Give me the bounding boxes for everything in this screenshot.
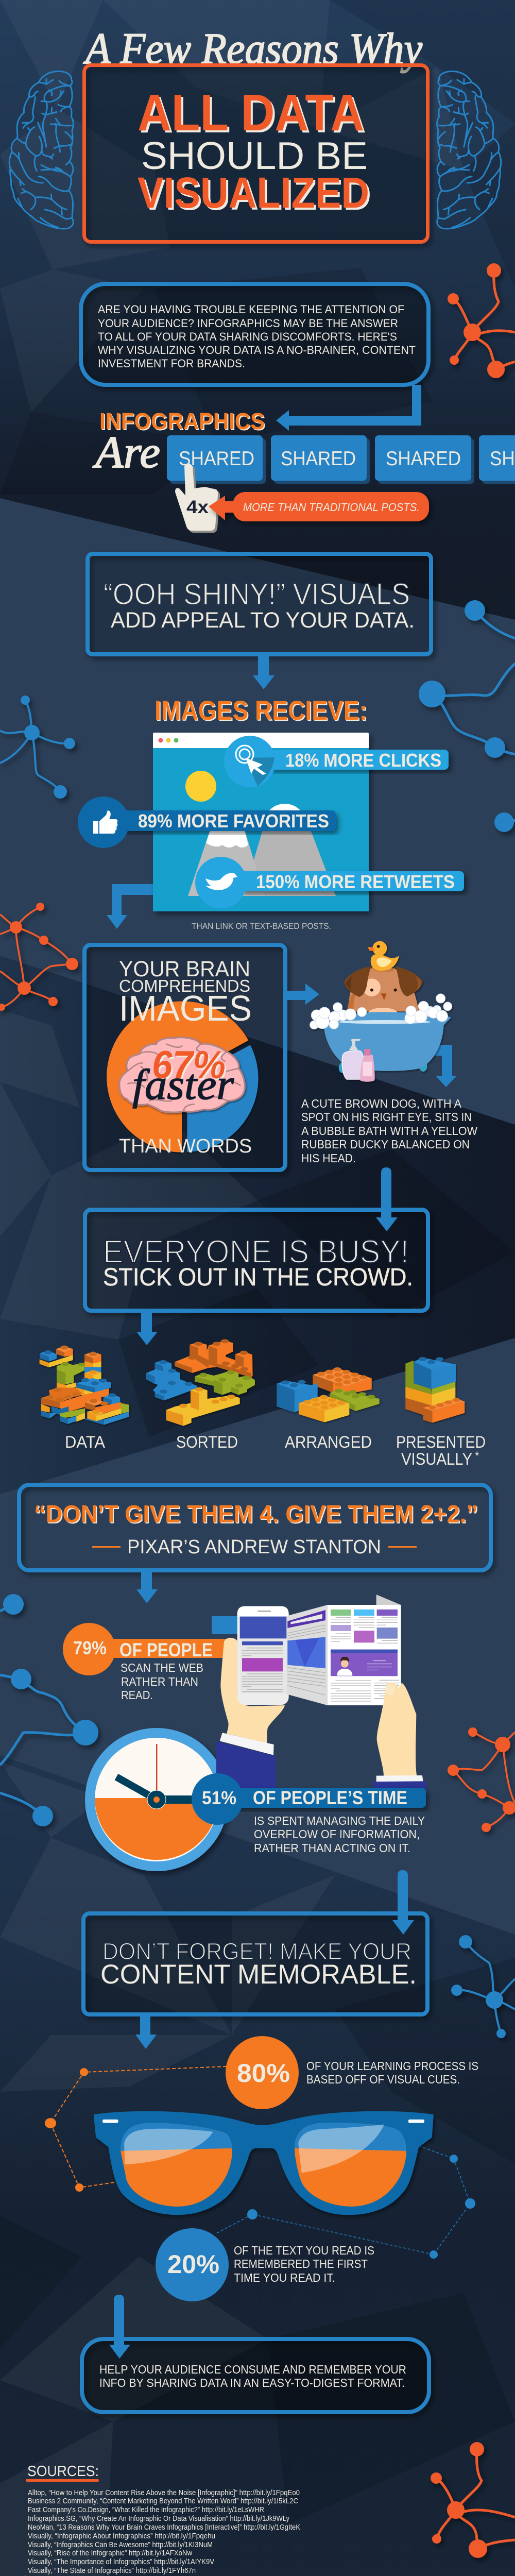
text block: closing copy: INFO BY SHARING DATA IN AN EASY-TO-DIGEST FORMAT. [99,2376,405,2389]
button: SHARED 1: SHARED [179,448,254,470]
text block: text remembered: TIME YOU READ IT. [234,2271,335,2284]
text block: source list: Alltop, “How to Help Your Content Rise Above the Noise [Infographic]” http://bit.ly/1FpqEo0 [28,2489,300,2497]
stat: 79% of people: OF PEOPLE [119,1639,213,1660]
heading: your brain: YOUR BRAIN [119,957,250,981]
text block: source list: Visually, “Rise of the Infographic” http://bit.ly/1AFXoNw [28,2549,192,2557]
label: data: DATA [65,1433,106,1451]
panel: pixar quote box [19,1485,491,1570]
arrow: quote to stats [136,1572,158,1603]
quote: don't give them 4: “DON’T GIVE THEM 4. GIVE THEM 2+2.” [35,1502,479,1529]
panel: intro text box [81,284,428,385]
heading: SHOULD BE: SHOULD BE [141,134,368,177]
text block: managing overflow: RATHER THAN ACTING ON IT. [254,1841,410,1855]
neuron: blue left [0,696,75,799]
stat: 18% more clicks [224,736,449,787]
heading: sources: SOURCES: [27,2463,99,2480]
callout: more than traditional posts [209,492,429,521]
heading: IMAGES RECIEVE: IMAGES RECIEVE: [156,697,368,727]
heading: ALL DATA: ALL DATA [140,86,366,144]
button: SHARED 4 cropped [479,435,515,484]
text block: scan the web: READ. [121,1688,153,1702]
panel: don't forget box [83,1913,427,2014]
heading: INFOGRAPHICS: INFOGRAPHICS [100,409,266,435]
text block: closing copy [99,2363,406,2389]
heading: VISUALIZED: VISUALIZED [140,171,371,219]
heading: content memorable: CONTENT MEMORABLE. [100,1959,417,1990]
button: SHARED 2 [271,435,370,484]
stat: 20% [156,2228,229,2301]
stat: 80% [226,2036,299,2109]
text block: dog description: HIS HEAD. [301,1151,356,1165]
stat: 20%: 20% [167,2250,219,2279]
heading: stick out in the crowd: STICK OUT IN THE CROWD. [103,1264,413,1291]
stat: 18% more clicks: 18% MORE CLICKS [285,750,441,771]
text block: source list: Visually, “Infographics Can Be Awesome” http://bit.ly/1KI3NuM [28,2541,213,2549]
text block: learning process: BASED OFF OF VISUAL CUES. [306,2073,460,2086]
label: presented visually: VISUALLY [401,1450,472,1468]
text block: scan the web [121,1661,203,1702]
label: presented visually [396,1433,486,1468]
illustration: dog in bubble bath with duck [310,941,452,1082]
heading: IMAGES RECIEVE: IMAGES RECIEVE: [154,696,367,726]
text block: dog description: SPOT ON HIS RIGHT EYE, SITS IN [301,1110,472,1124]
illustration: hands holding phone and brochure [216,1595,427,1789]
heading: ooh shiny visuals: “OOH SHINY!” VISUALS [104,578,410,611]
heading: INFOGRAPHICS: INFOGRAPHICS [99,408,265,434]
text block: dog description: A BUBBLE BATH WITH A YELLOW [301,1124,477,1138]
heading: everyone is busy: EVERYONE IS BUSY! [103,1234,409,1270]
text block: scan the web: SCAN THE WEB [121,1661,203,1674]
arrow: browser to brain box [107,884,153,929]
text block: source list: Infographics.SG, “Why Create An Infographic Or Data Visualisation” http://bit.ly/1Jk9WLy [28,2515,290,2523]
stat: 51% of people's time: 51% [202,1787,236,1808]
title: A Few Reasons Why: A Few Reasons Why [83,24,423,73]
illustration: lego stack presented visually [405,1357,465,1423]
neuron: blue top right [419,600,515,832]
text: than words: THAN WORDS [119,1136,252,1157]
stat: 89% more favorites: 89% MORE FAVORITES [138,810,329,832]
text block: learning process: OF YOUR LEARNING PROCESS IS [306,2059,478,2073]
text block: text remembered: OF THE TEXT YOU READ IS [234,2244,374,2257]
arrow: dog text to busy box [376,1167,398,1231]
chart: 67 percent pie [107,1001,259,1153]
illustration: lego pile data [40,1346,129,1425]
text block: managing overflow: OVERFLOW OF INFORMATION, [254,1827,420,1841]
text block: intro copy: INVESTMENT FOR BRANDS. [98,357,245,370]
label: presented visually: * [475,1449,479,1462]
stat: 89% more favorites [78,796,336,848]
arrow: dog down to description [435,1045,457,1087]
illustration: browser window [153,733,369,911]
stat: 51% of people's time: OF PEOPLE’S TIME [253,1787,407,1808]
text block: dog description: RUBBER DUCKY BALANCED ON [301,1138,470,1151]
stat: 51% of people's time [192,1773,426,1825]
attribution: pixar's andrew stanton: PIXAR’S ANDREW STANTON [127,1536,381,1558]
heading: add appeal: ADD APPEAL TO YOUR DATA. [111,608,415,633]
neuron: orange bottom right [431,2442,515,2558]
heading: VISUALIZED: VISUALIZED [138,168,369,217]
text block: source list: Business 2 Community, “Content Marketing Beyond The Written Word” http://bit.ly/1I5kL2C [28,2497,298,2505]
stat: 150% more retweets [195,857,464,908]
callout: more than traditional posts: MORE THAN TRADITIONAL POSTS. [243,501,420,514]
illustration: clock 51 percent [85,1728,228,1871]
dotted connector: blue [215,2141,475,2259]
illustration: lego pile arranged [277,1367,380,1422]
text block: learning process [306,2059,478,2086]
icon: pink brain [119,1038,245,1112]
arrow segment behind phone [212,1616,243,1634]
neuron: orange left [0,903,78,1011]
script word: Are: Are [93,428,160,478]
heading: don't forget: DON’T FORGET! MAKE YOUR [102,1938,411,1964]
text block: intro copy: WHY VISUALIZING YOUR DATA IS A NO-BRAINER, CONTENT [98,344,416,357]
text block: source list: Visually, “The State of Infographics” http://bit.ly/1FYh67n [28,2567,196,2575]
neuron: orange right [448,1727,515,1832]
label: sorted: SORTED [176,1433,238,1451]
label: presented visually: PRESENTED [396,1433,486,1451]
text block: source list: Visually, “The Importance of Infographics” http://bit.ly/1AIYK9V [28,2558,214,2566]
stat: 79% of people: 79% [73,1637,107,1658]
text block: scan the web: RATHER THAN [121,1675,198,1688]
button: SHARED 3 [375,435,474,484]
button: SHARED 2: SHARED [281,448,356,470]
stat: 79% of people [63,1623,234,1675]
text block: dog description [301,1097,477,1165]
text block: intro copy [98,303,416,370]
stat: 67%: 67% [152,1043,226,1087]
panel: brain comprehends box [84,945,285,1170]
heading: comprehends: COMPREHENDS [119,976,250,995]
arrow: to memorable box [392,1870,414,1935]
text block: source list [25,2489,300,2576]
text block: intro copy: YOUR AUDIENCE? INFOGRAPHICS MAY BE THE ANSWER [98,317,398,330]
icon: right brain outline [437,71,501,229]
arrow: intro box to infographics [276,385,421,431]
text block: text remembered: REMEMBERED THE FIRST [234,2257,368,2270]
text block: source list: NeoMan, “13 Reasons Why Your Brain Craves Infographics [Interactive]” http://bit.ly/1GgIteK [28,2523,300,2532]
text block: managing overflow: IS SPENT MANAGING THE DAILY [254,1814,425,1827]
text block: source list: Fast Company's Co.Design, “What Killed the Infographic?” http://bit.ly/1eLsWHR [28,2506,264,2514]
text block: intro copy: ARE YOU HAVING TROUBLE KEEPING THE ATTENTION OF [98,303,404,316]
icon: left brain outline [9,71,73,229]
text block: intro copy: TO ALL OF YOUR DATA SHARING DISCOMFORTS. HERE'S [98,330,397,343]
arrow: busy box to lego [136,1313,158,1345]
text block: source list: Visually, “Infographic About Infographics” http://bit.ly/1Fpqehu [28,2532,215,2540]
illustration: lego pile sorted [146,1339,255,1426]
label: arranged: ARRANGED [285,1433,372,1451]
neuron: blue right lower [451,1935,515,2038]
dotted connector: orange [45,2066,227,2192]
script word: faster: faster [132,1061,234,1109]
stat: 80%: 80% [237,2059,290,2088]
icon: pointing hand with 4x: 4x [186,497,209,517]
button: SHARED 1 [167,435,266,484]
button: SHARED 3: SHARED [386,448,461,470]
heading: IMAGES: IMAGES [119,988,252,1028]
heading: ALL DATA: ALL DATA [138,84,364,142]
stat: 67%: 67% [153,1045,227,1089]
illustration: glasses [94,2111,434,2215]
icon: pointing hand with 4x [175,464,220,533]
quote: don't give them 4: “DON’T GIVE THEM 4. GIVE THEM 2+2.” [34,1501,478,1528]
neuron: blue left lower [0,1594,98,1826]
panel: title frame [84,65,427,242]
panel: everyone is busy box [85,1210,428,1311]
arrow: to images receive [253,654,274,689]
text block: managing overflow [254,1814,425,1855]
text block: closing copy: HELP YOUR AUDIENCE CONSUME AND REMEMBER YOUR [99,2363,406,2376]
text block: text remembered [234,2244,374,2284]
text block: dog description: A CUTE BROWN DOG, WITH A [301,1097,462,1110]
arrow: brain box to dog [287,984,319,1005]
panel: ooh shiny box [88,554,431,654]
caption: than link or text-based posts: THAN LINK OR TEXT-BASED POSTS. [192,921,331,931]
stat: 150% more retweets: 150% MORE RETWEETS [256,871,455,892]
arrow: to closing box [109,2295,130,2359]
neuron: orange top right [448,263,515,378]
arrow: to glasses [135,2016,157,2049]
panel: closing box [82,2339,429,2412]
